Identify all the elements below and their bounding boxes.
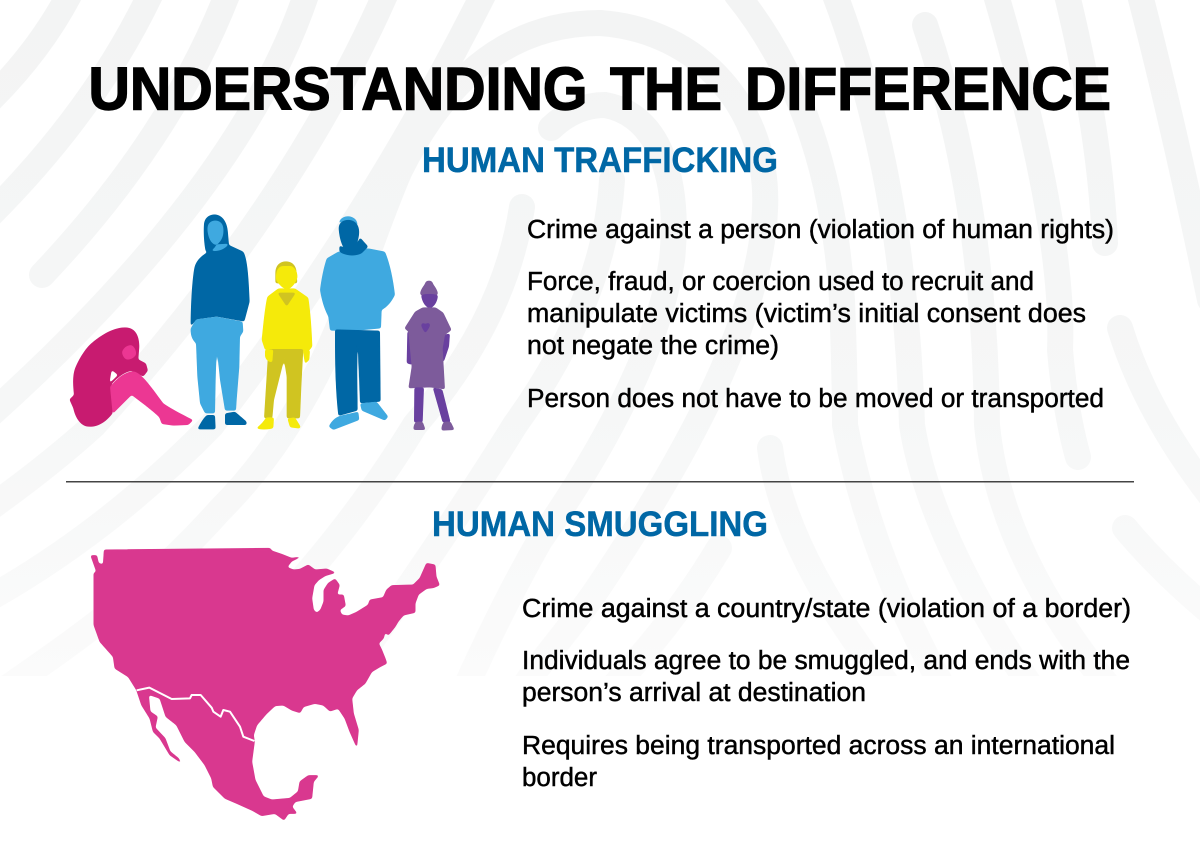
point: requires transport: Requires being transported across an international: [522, 732, 1115, 760]
point: force, fraud, coercion: [527, 268, 1086, 360]
title: UNDERSTANDING: [88, 56, 588, 122]
point: no transport needed: Person does not have to be moved or transported: [527, 385, 1104, 413]
illustration: five people silhouettes: [69, 214, 455, 431]
point: requires transport: border: [522, 764, 598, 792]
text block: smuggling points: [522, 595, 1131, 792]
point: individuals agree: Individuals agree to be smuggled, and ends with the: [522, 647, 1130, 675]
heading: human trafficking: HUMAN TRAFFICKING: [422, 141, 778, 180]
title: DIFFERENCE: [745, 56, 1111, 122]
border line: [137, 688, 254, 741]
point: crime against a person: Crime against a person (violation of human rights): [527, 216, 1114, 244]
heading: human smuggling: HUMAN SMUGGLING: [432, 505, 768, 544]
figure: hooded person: [191, 214, 250, 429]
point: force, fraud, coercion: manipulate victims (victim’s initial consent does: [527, 300, 1086, 328]
map: United States and Mexico: [91, 548, 439, 820]
point: requires transport: [522, 732, 1115, 792]
point: individuals agree: [522, 647, 1130, 707]
figure: man in hoodie: [320, 216, 395, 430]
figure: seated woman: [69, 327, 193, 427]
point: crime against a country: Crime against a country/state (violation of a border): [522, 595, 1131, 623]
figure: child in yellow: [256, 261, 312, 429]
title: [88, 56, 1111, 122]
title: THE: [610, 56, 722, 122]
text block: trafficking points: [527, 216, 1114, 413]
point: force, fraud, coercion: not negate the crime): [527, 332, 779, 360]
point: force, fraud, coercion: Force, fraud, or coercion used to recruit and: [527, 268, 1034, 296]
point: individuals agree: person’s arrival at destination: [522, 679, 866, 707]
figure: young girl: [404, 281, 455, 431]
